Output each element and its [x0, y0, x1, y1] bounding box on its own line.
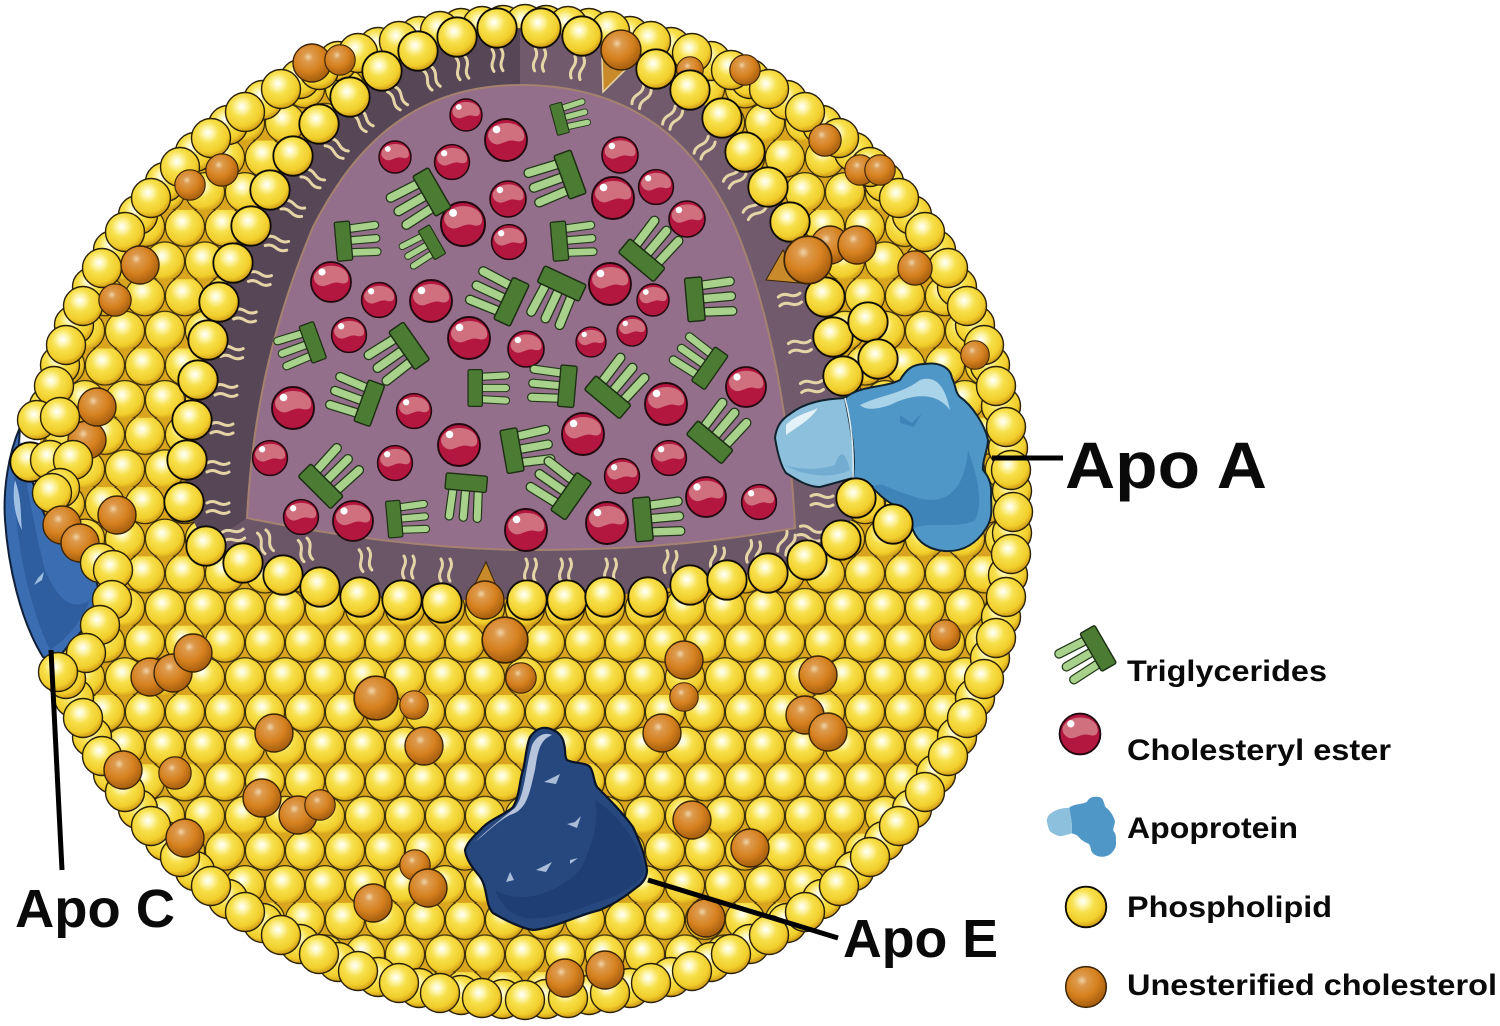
label: Apo E: Apo E [843, 909, 998, 969]
leader line: Apo C [51, 650, 62, 870]
Apo E protein [465, 728, 647, 930]
icon: phospholipid [1066, 887, 1106, 927]
band left side [184, 28, 520, 546]
phospholipid tails [207, 49, 833, 581]
unesterified cholesterol on surface [68, 44, 989, 997]
leader line: Apo E [648, 880, 838, 938]
label: Apo A: Apo A [1065, 428, 1267, 502]
leader line: Apo A [992, 456, 1063, 460]
icon: unesterified cholesterol [1066, 967, 1106, 1007]
triglycerides in the core [272, 96, 755, 542]
icon: triglyceride [1052, 625, 1116, 688]
core [247, 85, 795, 550]
membrane rim phospholipids [164, 8, 898, 623]
lipoprotein particle sphere [5, 4, 1033, 1020]
cholesterol cones in membrane [472, 58, 800, 590]
legend label: Unesterified cholesterol: Unesterified cholesterol [1127, 969, 1497, 1002]
edge ring of phospholipids [34, 4, 1032, 1020]
phospholipids beside Apo A [836, 478, 913, 544]
lower band [206, 518, 841, 600]
legend [1047, 625, 1497, 1007]
cut-away membrane band [184, 28, 860, 600]
Apo C protein [5, 427, 98, 659]
icon: apoprotein [1047, 797, 1116, 857]
label: Apo C: Apo C [15, 879, 175, 939]
legend label: Triglycerides: Triglycerides [1127, 655, 1327, 688]
band right side [184, 28, 860, 600]
staggered outer ring of phospholipids [30, 6, 1032, 1018]
legend label: Cholesteryl ester: Cholesteryl ester [1127, 734, 1391, 767]
cholesteryl ester spheres in the core [253, 99, 776, 551]
phospholipid surface [35, 22, 1015, 1002]
Apo A protein [775, 364, 991, 551]
icon: cholesteryl ester [1060, 714, 1100, 754]
surface phospholipids over Apo C [10, 398, 132, 692]
legend label: Apoprotein: Apoprotein [1127, 812, 1298, 845]
legend label: Phospholipid: Phospholipid [1127, 891, 1332, 924]
